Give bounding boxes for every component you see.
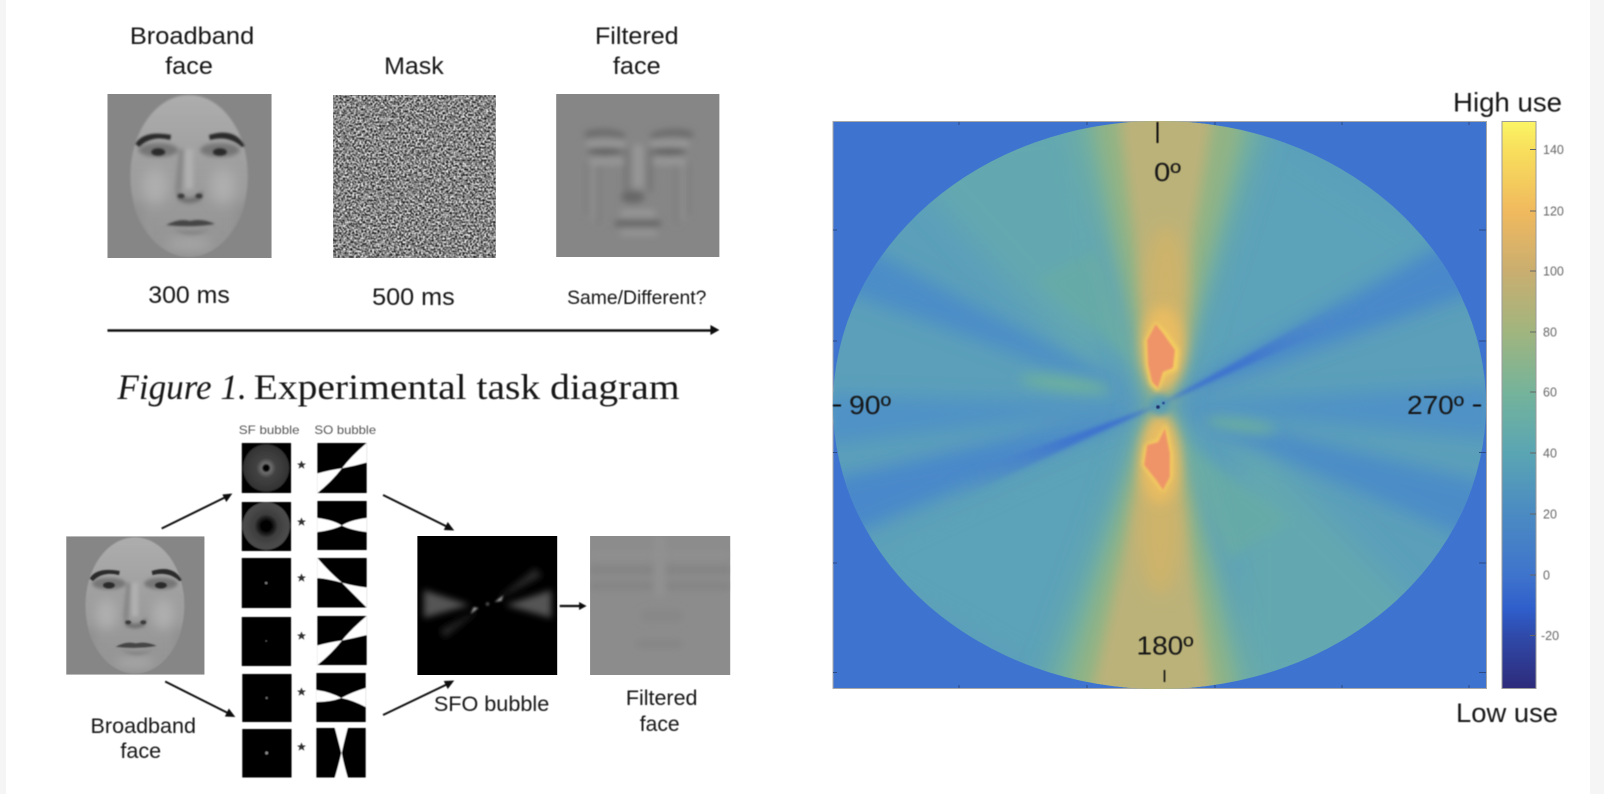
dark diagonal band [1000, 328, 1302, 475]
vertical tan band [1090, 110, 1214, 700]
image: filtered face output [590, 536, 730, 675]
label: SF bubble: SF bubble [239, 425, 299, 437]
image: filtered face [556, 94, 719, 257]
arrow: face to top bubbles [162, 494, 232, 528]
colorbar tick labels [1541, 143, 1564, 643]
title: figure 1 caption: Experimental task diagram [254, 367, 680, 407]
heading: filtered face: Filtered [595, 23, 679, 50]
arrow: SFO to filtered face [560, 602, 587, 610]
colorbar tick labels: 140 [1543, 143, 1564, 157]
arrow: timeline [107, 325, 719, 335]
quadrant teal tint [880, 128, 1402, 678]
colorbar tick labels: 100 [1543, 264, 1564, 278]
marker: 90 degrees [833, 390, 892, 420]
label: 500 ms: 500 ms [372, 284, 455, 311]
arrow: top bubbles to SFO [383, 495, 454, 530]
blue bands [833, 247, 1486, 532]
heading: mask: Mask [384, 53, 444, 80]
marker: 0 degrees [1154, 122, 1182, 187]
image: noise mask [333, 95, 496, 258]
arrow: face to bottom bubbles [165, 682, 235, 717]
colorbar tick labels: 60 [1543, 386, 1557, 400]
left column [66, 23, 730, 777]
colorbar tick labels: 120 [1543, 204, 1564, 218]
panel: bubble filtering method [66, 425, 730, 778]
yellow halos [1142, 322, 1179, 492]
SO bubble column [316, 443, 367, 778]
marker: 180 degrees: 180º [1136, 630, 1194, 660]
marker: 180 degrees [1136, 630, 1194, 682]
colorbar tick labels: 40 [1543, 446, 1557, 460]
label: high use: High use [1453, 88, 1562, 118]
centre specks [1156, 402, 1165, 409]
orange blobs [1144, 324, 1175, 490]
image: broadband face [107, 94, 272, 258]
title: figure 1 caption [116, 367, 680, 407]
label: filtered face: Filtered [626, 687, 697, 710]
label: SFO bubble: SFO bubble [434, 693, 549, 716]
chart: polar heatmap [825, 110, 1495, 700]
image: SFO bubble [417, 536, 557, 675]
label: same/different: Same/Different? [567, 288, 706, 309]
colorbar tick labels: 80 [1543, 326, 1557, 340]
label: broadband face second line: face [120, 740, 161, 763]
vertical green band [1040, 110, 1268, 700]
marker: 90 degrees: 90º [849, 390, 892, 420]
colorbar tick labels: -20 [1541, 629, 1559, 643]
panel: experimental task diagram [107, 23, 719, 335]
colorbar tick labels: 0 [1543, 568, 1550, 582]
marker: 0 degrees: 0º [1154, 157, 1182, 187]
colorbar [1453, 88, 1564, 728]
axis ticks [833, 122, 1486, 688]
heading: broadband face: Broadband [130, 23, 254, 50]
heading: broadband face second line: face [165, 53, 213, 80]
label: SO bubble: SO bubble [314, 425, 376, 437]
heading: filtered face second line: face [613, 53, 661, 80]
title: figure 1 caption: Figure 1. [116, 367, 247, 407]
label: filtered face second line: face [640, 713, 680, 736]
stars between columns [297, 460, 306, 751]
label: low use: Low use [1456, 698, 1558, 728]
central gap [1149, 395, 1171, 415]
image: broadband face [66, 536, 204, 675]
colorbar tick labels: 20 [1543, 508, 1557, 522]
arrow: bottom bubbles to SFO [383, 680, 454, 715]
warm core [1138, 225, 1187, 595]
green wedges near centre [1024, 259, 1273, 554]
label: broadband face: Broadband [91, 715, 196, 738]
SF bubble column [242, 443, 292, 778]
label: 300 ms: 300 ms [148, 282, 230, 309]
marker: 270 degrees: 270º [1407, 390, 1465, 420]
